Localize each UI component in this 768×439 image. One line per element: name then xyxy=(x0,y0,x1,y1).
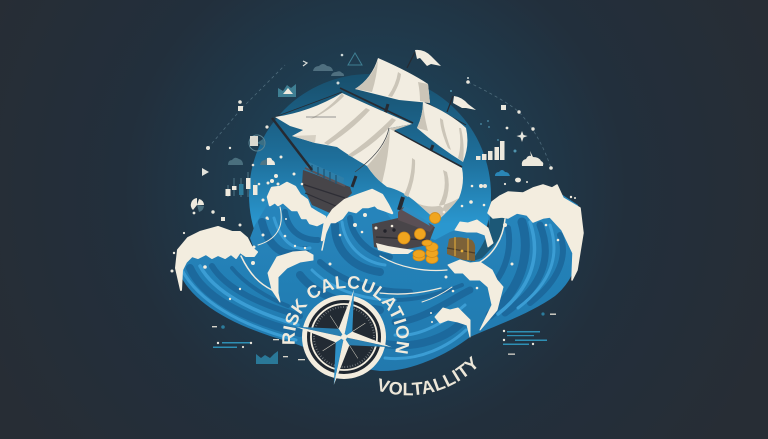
droplets and spray xyxy=(203,156,576,323)
foam: third wave xyxy=(322,190,392,240)
masts and rigging xyxy=(272,52,466,210)
dashed connector line xyxy=(208,65,285,148)
icon: candlestick chart xyxy=(226,172,258,197)
ship xyxy=(272,50,476,221)
right floating data icons xyxy=(450,80,553,188)
foam: middle right wave xyxy=(448,260,503,330)
data dots xyxy=(170,164,254,272)
data dots xyxy=(336,54,469,84)
dash and dot xyxy=(541,312,556,316)
ocean waves xyxy=(176,183,583,371)
cream curl lines xyxy=(241,207,505,302)
water body xyxy=(179,190,582,371)
gold coins xyxy=(398,212,440,264)
top aft sail xyxy=(417,102,467,162)
small dashes xyxy=(273,339,305,360)
icon: clouds xyxy=(228,158,275,165)
icon: bar chart xyxy=(476,141,504,160)
data dots xyxy=(466,80,553,188)
line bars xyxy=(503,330,547,355)
forward ship hull xyxy=(372,206,435,252)
icon: sparkle xyxy=(516,131,528,142)
aft ship hull xyxy=(302,162,352,214)
icon: chevron xyxy=(303,61,307,66)
compass rings xyxy=(304,298,384,376)
left floating data icons xyxy=(170,61,307,272)
dark wave bands xyxy=(190,212,563,345)
foam: second wave xyxy=(268,183,325,225)
icon: star dots xyxy=(450,90,516,152)
blue sky disc behind the ship xyxy=(249,74,491,316)
lower right main sail xyxy=(367,129,463,221)
icon: small cloud xyxy=(515,178,521,182)
curved title: risk calculation: RISK CALCULATION xyxy=(282,276,410,354)
foam: inner left wave xyxy=(268,251,313,302)
area chart xyxy=(256,351,278,364)
line bars xyxy=(213,342,252,348)
icon: blue cloud xyxy=(495,170,510,176)
foam: small wave by the chest xyxy=(455,220,493,247)
minor compass points xyxy=(323,316,365,358)
light wave bands xyxy=(182,218,554,359)
top fore sail xyxy=(355,58,430,103)
lower right icons xyxy=(503,312,556,355)
compass star xyxy=(286,279,402,395)
curved label: voltallity: VOLTALLITY xyxy=(379,356,476,396)
icon: play triangle xyxy=(202,168,209,176)
compass tick marks xyxy=(314,307,374,367)
foam: small lower right wave xyxy=(435,308,470,337)
compass xyxy=(286,279,402,395)
icon: pie chart xyxy=(249,135,265,151)
dashed connector curve xyxy=(468,82,551,168)
icon: clouds xyxy=(313,64,344,76)
dash and dot xyxy=(212,325,225,329)
icon: square nodes xyxy=(206,100,269,150)
main left sail xyxy=(275,93,412,172)
icon: cream cloud xyxy=(522,151,543,166)
foam under the forward hull xyxy=(376,243,414,254)
foam: large right wave xyxy=(488,185,583,280)
flags xyxy=(415,50,476,110)
dark pocket behind the right wave xyxy=(470,215,505,262)
compass hub xyxy=(341,334,347,340)
foam: left wave xyxy=(176,227,257,290)
lower left icons xyxy=(212,325,305,364)
icon: triangle xyxy=(348,53,362,65)
treasure chest xyxy=(447,237,475,261)
icon: segmented pie xyxy=(191,198,204,212)
icon: mountain chart xyxy=(278,84,296,97)
top floating icons xyxy=(313,53,469,84)
